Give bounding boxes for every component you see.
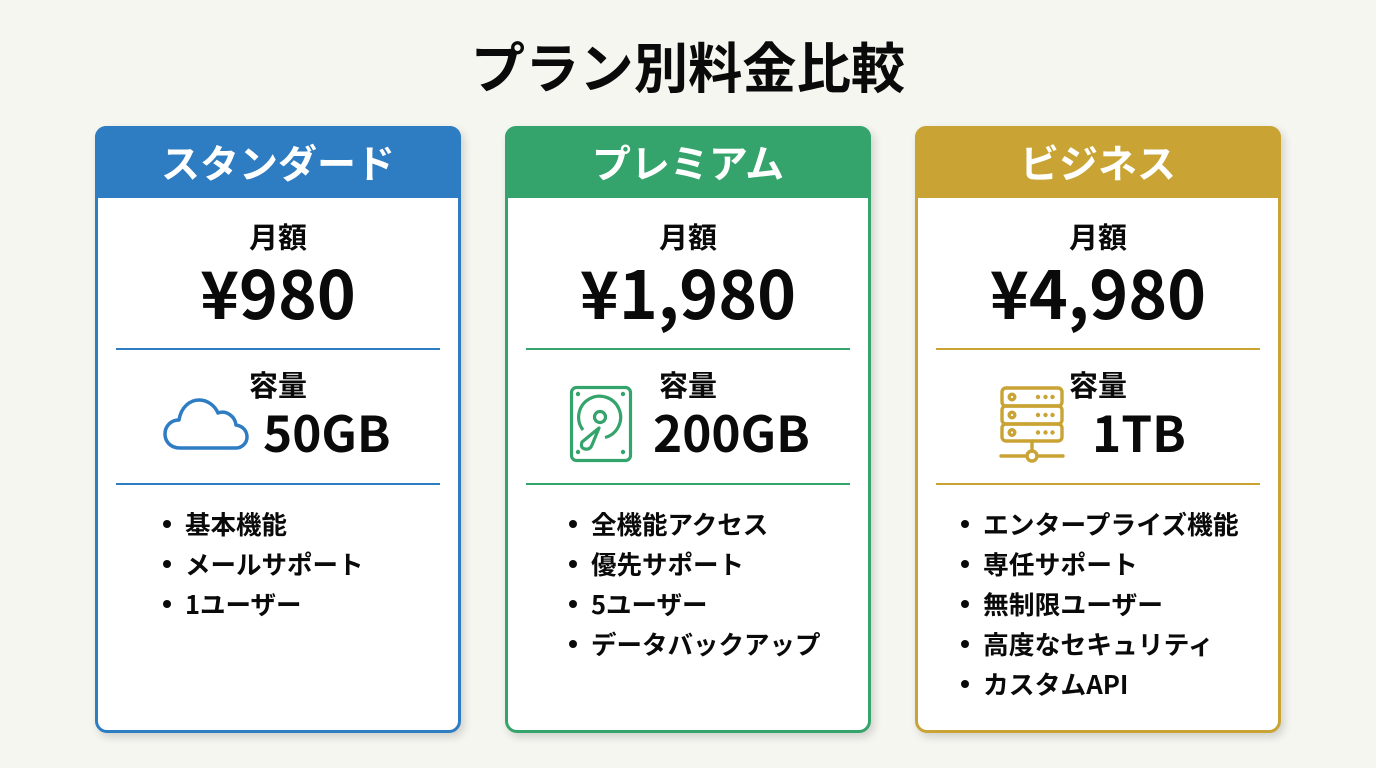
capacity value: 50GB — [263, 396, 391, 467]
icon: server rack — [999, 386, 1065, 463]
feature list: 1ユーザー — [185, 585, 302, 622]
monthly price label: 月額 — [659, 215, 717, 257]
icon: hard drive — [570, 386, 632, 462]
panel: business plan — [915, 126, 1281, 733]
feature list: 無制限ユーザー — [983, 585, 1163, 622]
feature list: 専任サポート — [983, 545, 1138, 582]
plan header: standard — [95, 126, 461, 198]
feature list — [163, 505, 364, 622]
capacity label: 容量 — [1069, 363, 1127, 405]
plan header: business: ビジネス — [1020, 134, 1176, 190]
title: プラン別料金比較 — [471, 25, 905, 104]
capacity label: 容量 — [659, 363, 717, 405]
monthly price value: ¥1,980 — [580, 243, 796, 339]
feature list — [961, 505, 1239, 702]
capacity value: 1TB — [1092, 396, 1186, 467]
capacity label: 容量 — [249, 363, 307, 405]
monthly price value: ¥4,980 — [990, 243, 1206, 339]
feature list: 基本機能 — [185, 505, 287, 542]
feature list: データバックアップ — [591, 625, 821, 662]
feature list: カスタムAPI — [983, 665, 1128, 702]
feature list: 優先サポート — [591, 545, 744, 582]
monthly price label: 月額 — [1069, 215, 1127, 257]
plan header: premium — [505, 126, 871, 198]
feature list: 高度なセキュリティ — [983, 625, 1214, 662]
feature list: 全機能アクセス — [591, 505, 768, 542]
monthly price value: ¥980 — [200, 243, 356, 339]
plan header: standard: スタンダード — [161, 134, 395, 190]
feature list: エンタープライズ機能 — [983, 505, 1239, 542]
panel: premium plan — [505, 126, 871, 733]
feature list: 5ユーザー — [591, 585, 708, 622]
monthly price label: 月額 — [249, 215, 307, 257]
feature list: メールサポート — [185, 545, 364, 582]
plan header: premium: プレミアム — [592, 134, 784, 190]
capacity value: 200GB — [653, 396, 810, 467]
icon: cloud — [163, 398, 249, 450]
plan header: business — [915, 126, 1281, 198]
panel: standard plan — [95, 126, 461, 733]
feature list — [569, 505, 821, 662]
